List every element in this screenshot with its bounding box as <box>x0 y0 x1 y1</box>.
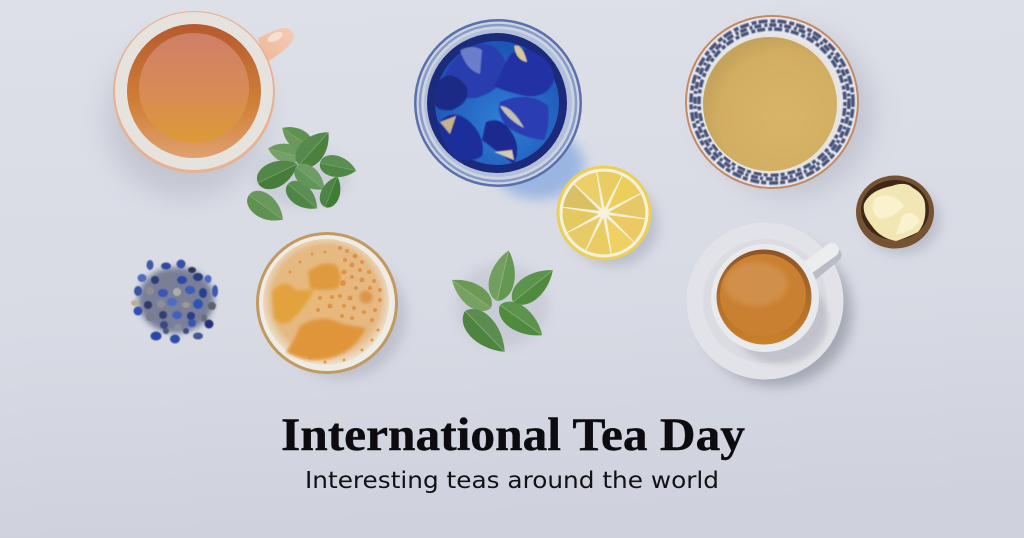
tea patches <box>272 264 372 360</box>
icon: orange tea cup <box>106 11 294 198</box>
icon: butterfly pea tea glass <box>414 19 584 199</box>
icon: bowl of butter <box>856 176 940 254</box>
petals <box>434 44 554 164</box>
subtitle: Interesting teas around the world <box>305 468 719 494</box>
icon: lemon slice <box>556 166 658 266</box>
icon: green tea leaves <box>445 248 561 361</box>
icon: patterned bowl of tea <box>685 15 872 194</box>
icon: mint leaves <box>242 120 358 229</box>
icon: frothy tea glass <box>256 232 406 378</box>
foam bubbles <box>288 246 382 364</box>
title: International Tea Day <box>281 409 746 461</box>
icon: white cup and saucer <box>686 222 852 386</box>
icon: dried blue flowers <box>131 260 218 344</box>
